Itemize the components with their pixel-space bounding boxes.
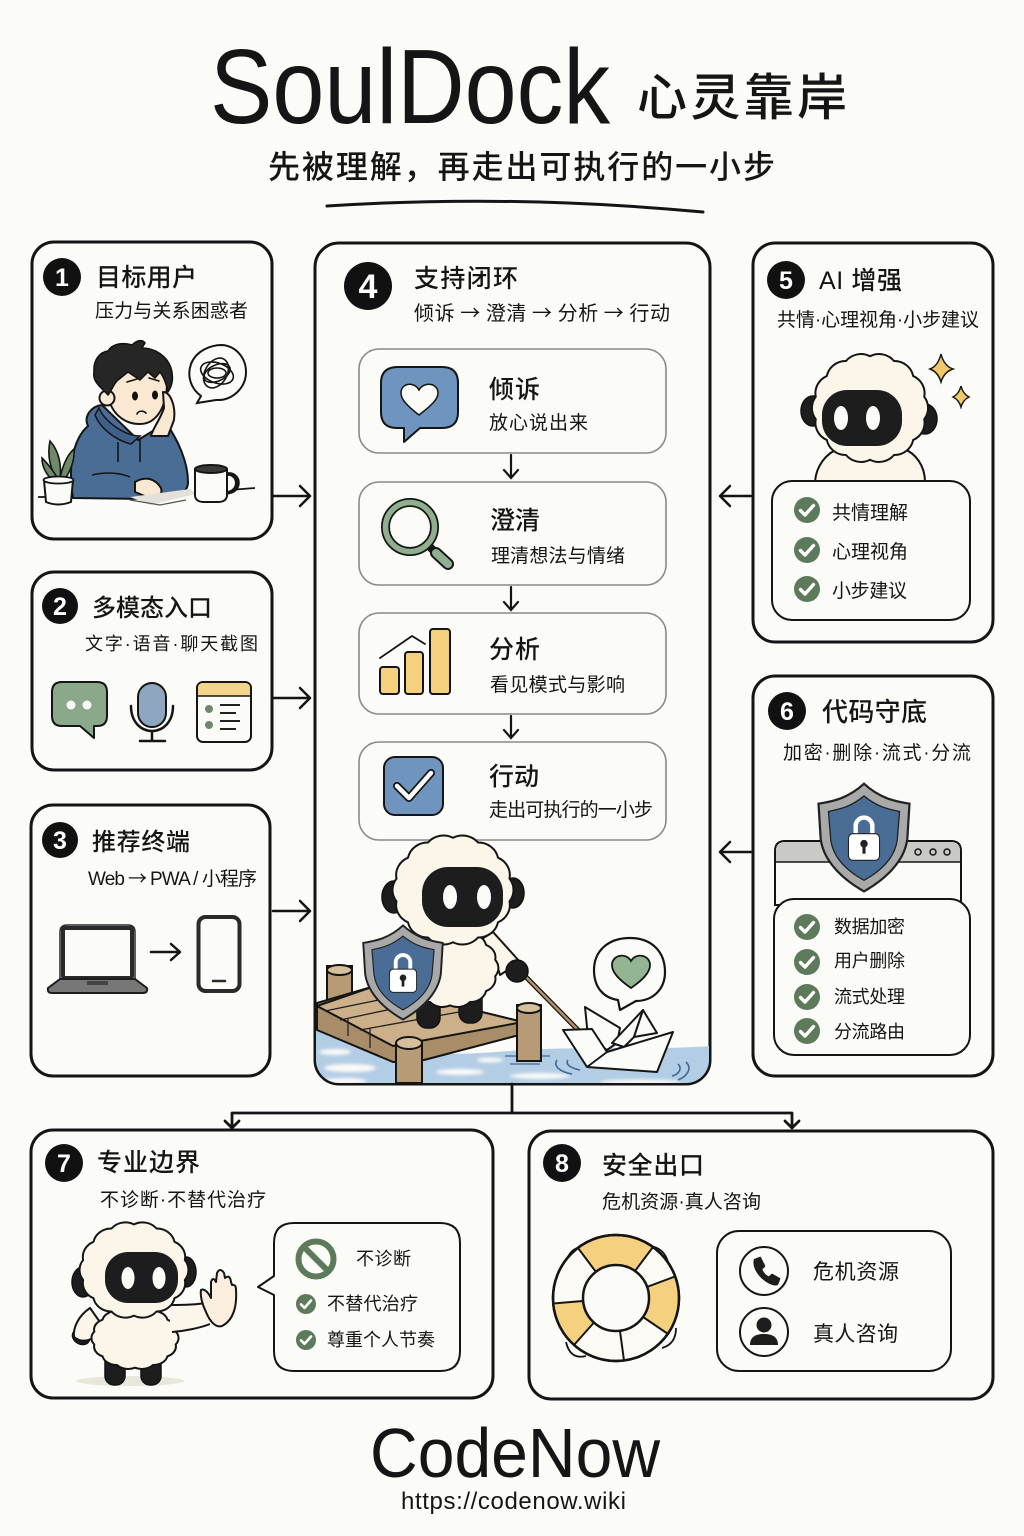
number badge 1: 1 (55, 264, 69, 292)
number badge 3: 3 (53, 827, 67, 855)
card: safeguards checklist (774, 899, 970, 1055)
arrow: clarify to analyse (504, 587, 518, 610)
connector: panel 4 to panels 7 and 8 (225, 1084, 799, 1128)
panel 7: professional boundaries (31, 1130, 493, 1398)
arrow: listen to clarify (504, 455, 518, 478)
card: support options (717, 1231, 951, 1371)
heading: multimodal input: 多模态入口 (92, 595, 212, 622)
description: platforms: PWA / 小程序 (150, 868, 257, 890)
heading: safe exit: 安全出口 (602, 1152, 704, 1180)
description: platforms (88, 864, 257, 891)
description: AI features: 共情·心理视角·小步建议 (777, 309, 979, 331)
description: target users: 压力与关系困惑者 (95, 300, 248, 322)
icon: lifebuoy (553, 1235, 679, 1361)
card: AI feature checklist: 小步建议 (832, 580, 907, 602)
icon: check square (384, 757, 443, 815)
card: support options: 危机资源 (813, 1261, 899, 1284)
icon: phone (198, 917, 240, 991)
heading: recommended devices: 推荐终端 (92, 829, 190, 856)
description: platforms: → (128, 864, 147, 891)
icon: rising bar chart (380, 629, 450, 694)
number badge 5 (767, 261, 805, 299)
number badge 7 (45, 1144, 83, 1182)
icon: person (740, 1308, 788, 1356)
description: input types: 文字·语音·聊天截图 (85, 634, 258, 654)
step card: clarify (359, 482, 666, 585)
step card: analyse: 分析 (489, 636, 540, 664)
description: safeguards: 加密·删除·流式·分流 (783, 742, 971, 764)
card: AI feature checklist: 心理视角 (832, 541, 908, 563)
speech bubble: boundaries list (258, 1223, 460, 1371)
icon: laptop (48, 925, 147, 993)
step card: clarify: 理清想法与情绪 (491, 545, 625, 567)
subtitle (268, 149, 775, 212)
step card: act: 走出可执行的一小步 (489, 799, 653, 821)
speech bubble: boundaries list: 尊重个人节奏 (327, 1330, 435, 1350)
title (210, 29, 847, 146)
illustration: worried person at a table (71, 341, 188, 499)
heading: professional boundaries: 专业边界 (97, 1149, 200, 1177)
pole (526, 977, 578, 1030)
card: safeguards checklist: 分流路由 (834, 1022, 905, 1042)
title: 心灵靠岸 (637, 70, 847, 126)
footer: url: https://codenow.wiki (401, 1488, 626, 1515)
step card: analyse: 看见模式与影响 (490, 674, 625, 696)
number badge 6: 6 (780, 698, 794, 726)
arrow: panel 5 to panel 4 (720, 486, 752, 506)
icon: tangled thought bubble (189, 345, 246, 403)
step card: analyse (359, 613, 666, 714)
table line and paper (38, 488, 255, 505)
step card: clarify: 澄清 (490, 507, 540, 535)
card: support options: 真人咨询 (813, 1323, 898, 1346)
heading: target users: 目标用户 (96, 264, 197, 292)
title: SoulDock (210, 29, 611, 146)
panel 2: multimodal input (32, 572, 272, 770)
card: safeguards checklist: 流式处理 (834, 987, 905, 1007)
arrow: analyse to act (504, 716, 518, 738)
shield (363, 925, 443, 1020)
dock (317, 965, 541, 1083)
icon: coffee mug (195, 465, 237, 502)
icon: microphone (131, 683, 173, 741)
paper boat (556, 1007, 689, 1080)
subtitle: 先被理解，再走出可执行的一小步 (268, 149, 775, 185)
number badge 5: 5 (779, 267, 793, 295)
arrow: panel 6 to panel 4 (720, 842, 752, 862)
icon: potted plant (42, 441, 74, 504)
heading: support loop: 支持闭环 (414, 265, 518, 293)
arrow: panel 2 to panel 4 (273, 688, 310, 708)
heading: code safeguards: 代码守底 (822, 697, 927, 727)
number badge 6 (768, 692, 806, 730)
illustration: sheep on dock with paper boat (316, 835, 710, 1086)
speech bubble: boundaries list: 不替代治疗 (327, 1294, 418, 1314)
description: boundaries: 不诊断·不替代治疗 (100, 1189, 266, 1211)
icon: heart bubble (381, 367, 458, 442)
icon: phone (740, 1247, 788, 1295)
illustration: sheep with sparkles (801, 354, 969, 482)
panel 5: AI enhancement (753, 243, 993, 642)
card: AI feature checklist: 共情理解 (832, 502, 908, 524)
arrow: panel 1 to panel 4 (273, 486, 310, 506)
panel 3: recommended devices (31, 805, 270, 1076)
footer: brand: CodeNow (370, 1414, 661, 1492)
water (316, 1028, 710, 1086)
description: loop steps: 倾诉 → 澄清 → 分析 → 行动 (414, 297, 670, 326)
number badge 1 (43, 258, 81, 296)
icon: prohibited sign (298, 1242, 334, 1276)
number badge 4 (344, 262, 392, 310)
arrow: laptop to phone (151, 944, 180, 960)
icon: magnifier (386, 502, 448, 564)
panel 1: target users (32, 242, 272, 539)
step card: act (359, 742, 666, 840)
heart bubble (594, 938, 665, 1010)
number badge 8: 8 (555, 1150, 569, 1178)
step card: listen: 倾诉 (489, 376, 540, 404)
heading: AI enhancement: AI 增强 (819, 267, 902, 295)
panel 6: code safeguards (753, 676, 993, 1076)
number badge 2: 2 (53, 593, 67, 621)
speech bubble: boundaries list: 不诊断 (356, 1249, 411, 1269)
description: safe exit: 危机资源·真人咨询 (602, 1191, 761, 1213)
number badge 8 (543, 1144, 581, 1182)
description: platforms: Web (88, 869, 125, 890)
card: safeguards checklist: 用户删除 (834, 951, 905, 971)
step card: listen: 放心说出来 (489, 412, 588, 434)
illustration: browser window and shield (775, 784, 961, 905)
panel 4: support loop (315, 243, 710, 1086)
icon: screenshot list (197, 682, 251, 742)
number badge 3 (42, 822, 78, 858)
panel 8: safe exit (529, 1131, 993, 1399)
card: safeguards checklist: 数据加密 (834, 917, 905, 937)
number badge 2 (42, 588, 78, 624)
step card: act: 行动 (489, 763, 539, 791)
number badge 7: 7 (57, 1150, 71, 1178)
arrow: panel 3 to panel 4 (273, 901, 310, 921)
step card: listen (359, 349, 666, 453)
illustration: sheep raising hand (70, 1222, 236, 1386)
sheep (382, 835, 528, 1028)
icon: chat bubble (52, 682, 107, 738)
card: AI feature checklist (772, 481, 970, 620)
number badge 4: 4 (359, 268, 378, 306)
